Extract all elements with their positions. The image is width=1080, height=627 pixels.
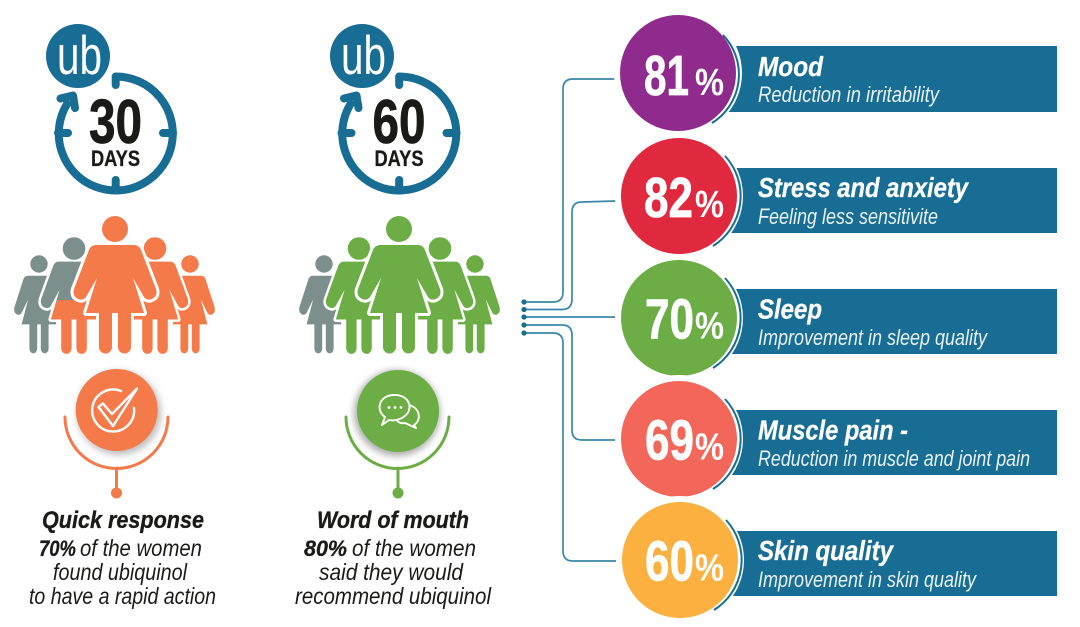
badge: word of mouth xyxy=(346,370,449,498)
ub badge: ub xyxy=(341,24,386,86)
row: sleep 70%: Improvement in sleep quality xyxy=(758,325,989,350)
row: skin quality 60% xyxy=(616,496,1057,624)
row: mood 81%: % xyxy=(695,62,724,104)
row: mood 81%: 81 xyxy=(644,44,689,108)
row: stress and anxiety 82%: % xyxy=(695,184,724,226)
row: stress and anxiety 82%: 82 xyxy=(644,166,693,230)
row: muscle pain 69%: 69 xyxy=(645,408,694,472)
row: sleep 70%: % xyxy=(695,306,724,348)
text block: word of mouth: said they would xyxy=(319,559,464,585)
row: sleep 70%: Sleep xyxy=(758,294,822,324)
row: mood 81%: Reduction in irritability xyxy=(758,82,941,107)
circular arrow timer xyxy=(58,76,173,190)
text block: quick response: Quick response xyxy=(42,507,204,534)
clock: 30 days xyxy=(46,24,173,190)
text block: quick response: of the women xyxy=(80,535,202,561)
row: muscle pain 69% xyxy=(615,375,1057,503)
text block: word of mouth: of the women xyxy=(352,535,476,561)
row: sleep 70% xyxy=(615,254,1057,382)
text block: quick response: found ubiquinol xyxy=(53,559,188,585)
60 days label: DAYS xyxy=(374,146,424,171)
icon: check mark xyxy=(92,388,137,431)
row: muscle pain 69%: Muscle pain - xyxy=(758,414,908,446)
clock: 60 days xyxy=(330,24,456,190)
text block: quick response: to have a rapid action xyxy=(29,583,216,609)
row: muscle pain 69%: % xyxy=(695,426,724,468)
60 days label: 60 xyxy=(372,88,426,157)
row: mood 81% xyxy=(614,9,1057,137)
row: skin quality 60%: 60 xyxy=(645,530,694,594)
people group: green xyxy=(299,216,500,354)
row: stress and anxiety 82% xyxy=(615,132,1057,260)
text block: word of mouth: recommend ubiquinol xyxy=(295,583,492,609)
people group: orange xyxy=(14,216,215,354)
text block: word of mouth: Word of mouth xyxy=(317,507,469,534)
30 days label xyxy=(89,88,142,171)
row: skin quality 60%: Skin quality xyxy=(758,535,894,566)
row: stress and anxiety 82%: Feeling less sensitivite xyxy=(758,204,938,229)
row: skin quality 60%: Improvement in skin quality xyxy=(758,567,978,592)
text block: quick response: 70% xyxy=(39,536,76,561)
row: skin quality 60%: % xyxy=(695,548,724,590)
connector lines xyxy=(521,79,616,561)
30 days label: 30 xyxy=(89,88,142,157)
text block: quick response xyxy=(29,507,216,609)
row: stress and anxiety 82%: Stress and anxiety xyxy=(758,172,969,203)
30 days label: DAYS xyxy=(91,146,140,171)
row: sleep 70%: 70 xyxy=(645,288,694,352)
badge: quick response xyxy=(65,369,168,498)
text block: word of mouth xyxy=(295,507,492,609)
ub badge: ub xyxy=(57,24,102,86)
row: mood 81%: Mood xyxy=(758,51,824,82)
text block: word of mouth: 80% xyxy=(304,536,347,561)
60 days label xyxy=(372,88,426,171)
circular arrow timer xyxy=(342,76,456,190)
icon: speech bubbles xyxy=(380,395,419,428)
